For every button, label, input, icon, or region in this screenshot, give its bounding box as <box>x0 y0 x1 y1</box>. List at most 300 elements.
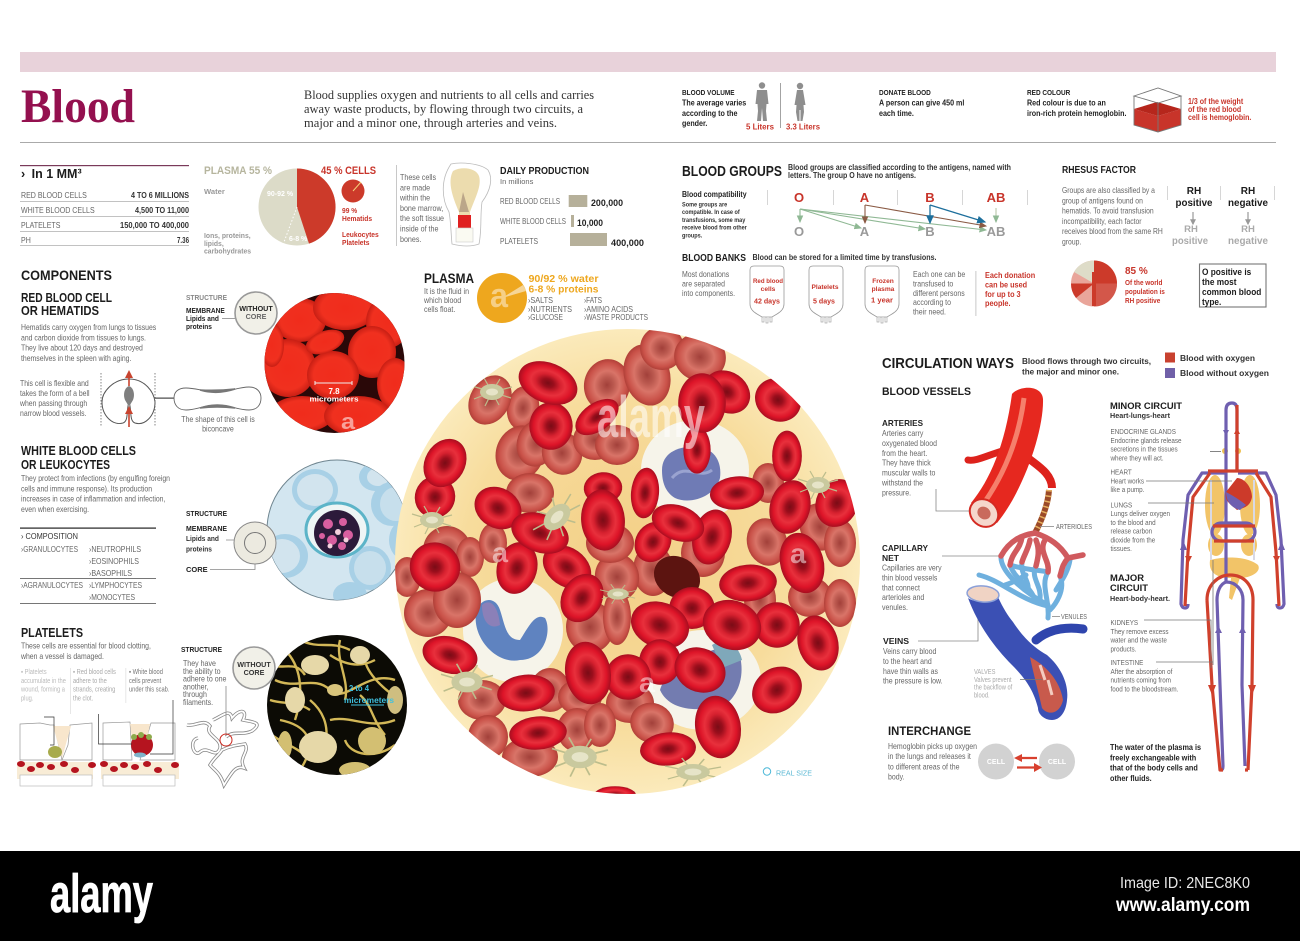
substances list: ›AMINO ACIDS <box>584 304 633 314</box>
heading: PLASMA <box>424 271 474 286</box>
plasma water note: The water of the plasma is <box>1110 743 1202 752</box>
arteries text: muscular walls to <box>882 468 935 478</box>
description: Groups are also classified by a <box>1062 185 1156 195</box>
icon: without core circle, red cell: WITHOUT <box>239 304 273 313</box>
substances list <box>528 295 648 322</box>
minor circuit text: secretions in the tissues <box>1110 446 1178 454</box>
icon: man silhouette <box>756 82 768 121</box>
blood volume note: BLOOD VOLUME <box>682 90 735 97</box>
ions label: lipids, <box>204 238 224 248</box>
heading: PLATELETS <box>21 626 83 640</box>
arterioles label <box>1040 524 1092 531</box>
blood bag: frozen plasma <box>865 266 899 323</box>
platelet note: filaments. <box>183 697 213 707</box>
major circuit text: water and the waste <box>1110 637 1167 645</box>
description: when a vessel is damaged. <box>20 651 104 661</box>
panel: rhesus factor <box>1062 165 1275 307</box>
major circuit text <box>1110 573 1178 694</box>
heading: BLOOD GROUPS <box>682 163 782 180</box>
arteries text <box>881 418 937 498</box>
bone marrow text: the soft tissue <box>400 214 444 223</box>
veins text: Veins carry blood <box>883 646 936 656</box>
step 2: strands, creating <box>73 686 116 694</box>
panel: circulation ways <box>881 352 1285 783</box>
description: the major and minor one. <box>1022 366 1119 376</box>
capillary text: arterioles and <box>882 593 924 602</box>
subheading: blood vessels: BLOOD VESSELS <box>882 386 971 398</box>
website: www.alamy.com <box>1115 895 1250 916</box>
donation callout: for up to 3 <box>985 289 1021 299</box>
recipient letters <box>794 224 1005 239</box>
table rows: 7.36 <box>177 235 189 245</box>
RH negative column: RH <box>1241 186 1255 197</box>
RH positive column: positive <box>1176 198 1213 209</box>
bone marrow text: bones. <box>400 234 421 244</box>
compatibility note: compatible. In case of <box>682 209 741 216</box>
minor circuit text: like a pump. <box>1110 487 1144 494</box>
watermarks: a <box>492 537 508 568</box>
description: These cells are essential for blood clotting, <box>21 641 151 651</box>
image id: Image ID: 2NEC8K0 <box>1120 875 1250 892</box>
flexible note: when passing through <box>19 398 87 408</box>
RH positive column: RH <box>1184 224 1198 235</box>
composition table: › COMPOSITION <box>21 531 78 541</box>
flexible note: This cell is flexible and <box>20 378 89 388</box>
icon: without core circle, red cell <box>235 292 277 334</box>
venules label <box>1052 614 1087 621</box>
heading: BLOOD BANKS <box>682 253 746 264</box>
capillary text: venules. <box>882 603 908 612</box>
transfusion text: transfused to <box>913 279 953 289</box>
table rows: 4,500 TO 11,000 <box>135 205 189 215</box>
watermarks: a <box>790 538 806 569</box>
substances list: ›GLUCOSE <box>528 312 563 322</box>
icon: cell structure circle <box>234 522 276 564</box>
table rows: 4 TO 6 MILLIONS <box>131 190 189 200</box>
illustration: artery <box>964 388 1052 535</box>
description: are separated <box>682 279 725 289</box>
veins text <box>883 636 943 686</box>
blood bag: platelets: 5 days <box>813 296 835 306</box>
callout box: the most <box>1202 277 1237 287</box>
structure labels: STRUCTURE <box>186 509 227 518</box>
description: into components. <box>682 288 735 298</box>
icon: woman silhouette <box>794 83 806 121</box>
donor letters: A <box>860 190 870 205</box>
small pie: hematids <box>342 180 364 202</box>
minor circuit text: Heart works <box>1110 478 1145 485</box>
valves text: Valves prevent <box>974 676 1012 684</box>
header band <box>20 52 1276 72</box>
cells and exchange arrows: CELL <box>1048 759 1067 766</box>
step 3: under this scab. <box>129 686 170 694</box>
arteries text: ARTERIES <box>882 418 923 428</box>
blood bag: frozen plasma: plasma <box>872 286 895 293</box>
description: Hematids carry oxygen from lungs to tissues <box>21 322 156 332</box>
transfusion text: their need. <box>913 307 946 317</box>
recipient letters: B <box>925 224 935 239</box>
header rule <box>20 142 1276 143</box>
bone marrow text: bone marrow, <box>400 203 443 213</box>
diagram: biconcave cell <box>174 387 261 410</box>
arteries text: Arteries carry <box>882 428 924 438</box>
RH callout: RH positive <box>1125 298 1160 305</box>
heading: RHESUS FACTOR <box>1062 165 1137 176</box>
RH callout: 85 % <box>1125 266 1148 277</box>
blood bag: red blood cells: Red blood <box>753 278 783 285</box>
plasma water note: freely exchangeable with <box>1110 753 1196 762</box>
major circuit text: products. <box>1110 646 1136 654</box>
donate blood note: A person can give 450 ml <box>879 98 964 108</box>
composition table: ›BASOPHILS <box>89 568 132 578</box>
capillary text: CAPILLARY <box>882 543 928 553</box>
blood volume note: The average varies <box>682 98 746 108</box>
heading: DAILY PRODUCTION <box>500 165 589 177</box>
photo: platelets micrograph: micrometers <box>344 695 394 705</box>
leukocytes and platelets label: Leukocytes <box>342 231 379 239</box>
icon: without core circle, platelet: WITHOUT <box>237 660 271 669</box>
composition table: ›AGRANULOCYTES <box>21 580 83 590</box>
panel: components <box>19 267 261 433</box>
intro text: Blood supplies oxygen and nutrients to all cells and carries <box>304 88 594 102</box>
capillary text: Capillaries are very <box>882 563 942 573</box>
table rows: PLATELETS <box>21 220 60 230</box>
major circuit text: CIRCUIT <box>1110 583 1148 594</box>
description: Hemoglobin picks up oxygen <box>888 741 977 751</box>
photo: platelets micrograph: 2 to 4 <box>349 683 369 693</box>
structure labels <box>186 293 227 331</box>
description: Blood flows through two circuits, <box>1022 356 1151 366</box>
illustration: capillary net <box>979 533 1083 618</box>
table rows: WHITE BLOOD CELLS <box>21 205 95 215</box>
composition headline: 90/92 % water <box>528 273 598 285</box>
diagram: body circulation <box>1180 403 1285 770</box>
intro text: major and a minor one, through arteries and veins. <box>304 116 557 130</box>
icon: without core circle, red cell: CORE <box>246 312 267 321</box>
step 2: ▪ Red blood cells <box>73 669 116 676</box>
description: which blood <box>423 295 461 305</box>
composition table: ›GRANULOCYTES <box>21 544 78 554</box>
chart: plasma and cells pie <box>258 168 336 246</box>
footer band <box>0 851 1300 941</box>
callout box: O positive is <box>1202 267 1251 277</box>
description: group of antigens found on <box>1062 196 1143 205</box>
bright red blood cells <box>402 353 866 804</box>
compatibility note: transfusions, some may <box>682 216 746 224</box>
legend <box>1165 352 1269 378</box>
step 3: cells prevent <box>129 677 161 685</box>
description: in the lungs and releases it <box>888 752 972 761</box>
RH callout <box>1125 266 1165 305</box>
step 1: wound, forming a <box>20 686 65 694</box>
substances list: ›FATS <box>584 295 602 305</box>
plasma water note: other fluids. <box>1110 773 1152 783</box>
description: hematids. To avoid transfusion <box>1062 206 1154 216</box>
red colour note: RED COLOUR <box>1027 90 1070 97</box>
table rows: PH <box>21 235 31 245</box>
major circuit text: After the absorption of <box>1110 668 1172 676</box>
capillary text: thin blood vessels <box>882 573 938 583</box>
bar: red blood cells: 200,000 <box>591 198 623 209</box>
arteries text: They have thick <box>882 458 931 468</box>
minor circuit text: release carbon <box>1110 528 1152 536</box>
chart: RH pie <box>1071 260 1117 306</box>
RH callout: Of the world <box>1125 280 1162 287</box>
minor circuit text: Endocrine glands release <box>1110 437 1182 445</box>
donate blood note: each time. <box>879 108 914 118</box>
panel: plasma <box>423 271 648 323</box>
subheading: In millions <box>500 177 534 186</box>
diagram: bell shaped cell <box>101 370 174 427</box>
compatibility note: receive blood from other <box>682 224 747 232</box>
veins text: have thin walls as <box>883 666 938 676</box>
intro text <box>304 88 594 130</box>
structure labels: Lipids and <box>186 536 219 543</box>
substances list: ›SALTS <box>528 295 553 305</box>
blood bag: red blood cells <box>750 266 784 323</box>
blood bag: red blood cells: cells <box>761 286 776 293</box>
red colour note: Red colour is due to an <box>1027 98 1106 108</box>
description: receives blood from the same RH <box>1062 227 1163 236</box>
major circuit text: KIDNEYS <box>1110 620 1138 627</box>
ions label: Ions, proteins, <box>204 231 251 240</box>
step 2: the clot. <box>73 695 93 703</box>
real size marker <box>763 768 812 778</box>
panel: white blood cells <box>20 444 255 604</box>
callout box: common blood <box>1202 287 1261 297</box>
subheading: Blood can be stored for a limited time by transfusions. <box>752 253 936 262</box>
dark red cell <box>654 556 700 597</box>
platelets <box>412 378 838 786</box>
description: They protect from infections (by engulfing foreign <box>21 473 170 483</box>
bar: red blood cells: RED BLOOD CELLS <box>500 196 560 206</box>
glands <box>1222 448 1241 454</box>
RH negative column: RH <box>1241 224 1255 235</box>
hemoglobin callout: 1/3 of the weight <box>1188 96 1244 106</box>
veins text: the pressure is low. <box>883 676 943 686</box>
bone marrow text: These cells <box>400 172 436 182</box>
muted red blood cells <box>393 320 856 777</box>
arterioles label: ARTERIOLES <box>1056 524 1092 531</box>
blood bag: platelets <box>809 266 843 323</box>
heading: CIRCULATION WAYS <box>882 356 1014 372</box>
description: themselves in the spleen with aging. <box>21 353 131 363</box>
major circuit text: nutrients coming from <box>1110 677 1171 685</box>
chart: plasma and cells pie: 90-92 % <box>267 191 294 198</box>
structure labels: proteins <box>186 546 212 554</box>
icon: cube with red third <box>1134 88 1181 132</box>
heart <box>1226 478 1252 510</box>
chart: plasma pie: a <box>490 277 509 315</box>
real size marker: REAL SIZE <box>776 768 812 778</box>
bar: platelets: 400,000 <box>611 238 644 249</box>
RH positive column: RH <box>1187 186 1201 197</box>
valves text: blood. <box>974 692 990 700</box>
bone marrow text: inside of the <box>400 224 438 234</box>
venules label: VENULES <box>1061 614 1087 621</box>
leader with highlight <box>220 686 232 746</box>
heading: WHITE BLOOD CELLS <box>21 444 136 458</box>
valves text: VALVES <box>974 669 995 676</box>
ions label: carbohydrates <box>204 246 251 256</box>
flexible note: takes the form of a bell <box>20 388 90 398</box>
panel: blood banks <box>682 253 1035 323</box>
platelet note: They have <box>183 658 216 668</box>
hemoglobin callout: of the red blood <box>1188 104 1241 114</box>
donate blood note: DONATE BLOOD <box>879 90 931 97</box>
table rows <box>20 190 189 246</box>
platelet note: adhere to one <box>183 674 226 684</box>
composition table: ›MONOCYTES <box>89 592 135 602</box>
major circuit text: Heart-body-heart. <box>1110 594 1170 603</box>
label: 3.3 liters: 3.3 Liters <box>786 122 820 132</box>
flexible note: narrow blood vessels. <box>20 408 86 418</box>
table rows: RED BLOOD CELLS <box>21 190 87 200</box>
recipient letters: A <box>860 224 870 239</box>
panel: in 1 cubic millimeter table <box>20 165 189 246</box>
minor circuit text: where they will act. <box>1110 455 1164 463</box>
plasma label: PLASMA 55 % <box>204 165 272 177</box>
arteries text: withstand the <box>881 478 923 488</box>
diagram: platelet outlines <box>187 711 257 785</box>
step 2: adhere to the <box>73 677 107 685</box>
heading: COMPONENTS <box>21 267 112 283</box>
table rows: 150,000 TO 400,000 <box>120 220 189 230</box>
bar: platelets: PLATELETS <box>500 236 538 246</box>
heading: INTERCHANGE <box>888 724 971 738</box>
subheading: red blood cell: RED BLOOD CELL <box>21 291 112 305</box>
composition headline: 6-8 % proteins <box>528 284 599 296</box>
bar: white blood cells: WHITE BLOOD CELLS <box>500 216 566 226</box>
red vessels <box>1185 405 1279 770</box>
bar: white blood cells <box>500 215 603 229</box>
structure labels: Lipids and <box>186 316 219 323</box>
major circuit text: INTESTINE <box>1110 660 1144 667</box>
description: Most donations <box>682 269 729 279</box>
blood compatibility: Blood compatibility <box>682 189 747 199</box>
water label: Water <box>204 187 225 196</box>
minor circuit text: Heart-lungs-heart <box>1110 411 1170 420</box>
donor letters: O <box>794 190 804 205</box>
arteries text: oxygenated blood <box>882 438 937 448</box>
biconcave caption: The shape of this cell is <box>181 414 255 424</box>
structure label: STRUCTURE <box>181 645 222 654</box>
substances list: ›WASTE PRODUCTS <box>584 312 648 322</box>
chart: plasma pie <box>477 273 527 323</box>
watermarks <box>492 385 806 698</box>
platelet note: the ability to <box>183 666 221 676</box>
structure labels: CORE <box>186 565 208 574</box>
arteries text: from the heart. <box>882 448 927 458</box>
donation callout: people. <box>985 299 1011 308</box>
blood volume note: gender. <box>682 119 707 128</box>
description: They live about 120 days and destroyed <box>21 343 143 353</box>
cells and exchange arrows: CELL <box>987 759 1006 766</box>
transfusion text: Each one can be <box>913 269 965 279</box>
RH positive column <box>1172 186 1213 247</box>
platelet note: through <box>183 690 207 699</box>
chart: plasma and cells pie: 6-8 % <box>289 236 308 243</box>
RH positive column: positive <box>1172 236 1208 247</box>
RH negative column <box>1228 186 1268 247</box>
diagram: clot <box>98 700 179 786</box>
panel: blood groups <box>682 163 1028 239</box>
minor circuit text: MINOR CIRCUIT <box>1110 401 1182 412</box>
step 1: plug. <box>21 695 34 703</box>
platelet note: another, <box>183 682 208 692</box>
panel: blood groups: letters. The group O have no antigens. <box>788 171 916 180</box>
minor circuit text: dioxide from the <box>1110 537 1155 544</box>
white blood cells <box>463 420 761 730</box>
description: and carbon dioxide from tissues to lungs. <box>21 333 146 342</box>
composition table: ›NEUTROPHILS <box>89 544 141 554</box>
description: body. <box>888 772 905 782</box>
blood bag: platelets: Platelets <box>812 284 839 291</box>
diagram: wound with platelets <box>17 717 96 786</box>
donor letters: B <box>925 190 935 205</box>
legend: Blood with oxygen <box>1180 353 1255 363</box>
capillary text <box>882 543 942 612</box>
veins text: VEINS <box>883 636 909 646</box>
description: It is the fluid in <box>424 286 469 296</box>
major circuit text: food to the bloodstream. <box>1110 686 1178 694</box>
hematids label: Hematids <box>342 215 372 223</box>
photo: red blood cells micrograph: micrometers <box>310 394 358 404</box>
label: 5 liters: 5 Liters <box>746 122 774 132</box>
photo: red blood cells micrograph: a <box>341 409 356 434</box>
minor circuit text: LUNGS <box>1110 502 1133 510</box>
icon: without core circle, platelet <box>233 647 275 689</box>
legend: Blood without oxygen <box>1180 368 1269 378</box>
donation callout: Each donation <box>985 271 1035 280</box>
cells and exchange arrows <box>978 744 1075 780</box>
blood bag: frozen plasma: 1 year <box>871 296 893 304</box>
transfusion text: different persons <box>913 288 965 298</box>
panel: daily production <box>500 165 644 249</box>
title: Blood <box>21 80 135 133</box>
substances list: ›NUTRIENTS <box>528 304 572 314</box>
description: cells and immune response). Its production <box>21 484 152 493</box>
transfusion text: according to <box>913 298 951 307</box>
composition table: ›EOSINOPHILS <box>89 556 139 566</box>
subheading: red blood cell: OR HEMATIDS <box>21 304 99 318</box>
blood volume note: according to the <box>682 108 738 118</box>
compatibility note: groups. <box>682 232 703 239</box>
compatibility note: Some groups are <box>682 201 728 209</box>
minor circuit text <box>1110 401 1182 553</box>
icon: without core circle, platelet: CORE <box>244 668 265 677</box>
minor circuit text: HEART <box>1110 469 1132 477</box>
step 1: accumulate in the <box>21 677 66 685</box>
divider between figures <box>779 83 782 128</box>
structure labels: proteins <box>186 324 212 331</box>
recipient letters: O <box>794 224 804 239</box>
description: group. <box>1062 237 1081 247</box>
capillary text: that connect <box>882 583 921 592</box>
RH negative column: negative <box>1228 236 1268 247</box>
purple vessels <box>1181 403 1284 770</box>
panel: platelets <box>17 626 257 786</box>
bar: platelets <box>500 233 644 249</box>
structure labels <box>186 509 227 574</box>
footer logo: alamy <box>50 864 153 924</box>
panel: interchange <box>888 724 1075 782</box>
donor letters <box>794 190 1005 205</box>
photo: red blood cells micrograph: 7.8 <box>328 387 340 396</box>
bar: white blood cells: 10,000 <box>577 218 603 229</box>
RH callout: population is <box>1125 289 1165 296</box>
biconcave caption: biconcave <box>202 424 234 433</box>
